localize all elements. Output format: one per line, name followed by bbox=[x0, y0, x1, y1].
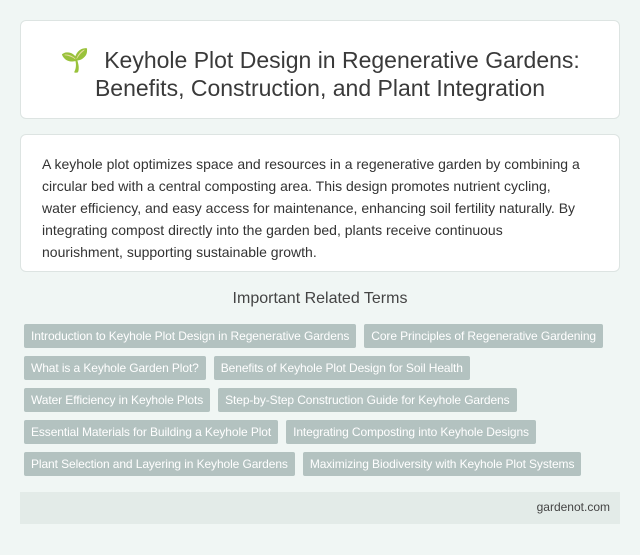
description card: integrating compost directly into the garden bed, plants receive continuous bbox=[42, 222, 503, 238]
tags: What is a Keyhole Garden Plot? bbox=[31, 361, 199, 375]
tags: Water Efficiency in Keyhole Plots bbox=[31, 393, 203, 407]
tags: Integrating Composting into Keyhole Designs bbox=[293, 425, 529, 439]
title card: Keyhole Plot Design in Regenerative Gardens: bbox=[104, 47, 580, 73]
tags bbox=[24, 324, 603, 476]
tags: Benefits of Keyhole Plot Design for Soil Health bbox=[221, 361, 463, 375]
tags: Essential Materials for Building a Keyhole Plot bbox=[31, 425, 271, 439]
description card: A keyhole plot optimizes space and resources in a regenerative garden by combining a bbox=[42, 156, 580, 172]
description card bbox=[20, 134, 620, 272]
footer: gardenot.com bbox=[537, 500, 610, 514]
footer bbox=[20, 492, 620, 524]
description card: water efficiency, and easy access for maintenance, enhancing soil fertility naturally. By bbox=[42, 200, 575, 216]
tags: Maximizing Biodiversity with Keyhole Plot Systems bbox=[310, 457, 574, 471]
title card bbox=[20, 20, 620, 119]
description card: circular bed with a central composting area. This design promotes nutrient cycling, bbox=[42, 178, 551, 194]
heading: related terms: Important Related Terms bbox=[233, 290, 407, 307]
tags: Core Principles of Regenerative Gardening bbox=[371, 329, 596, 343]
title card: Benefits, Construction, and Plant Integration bbox=[95, 75, 545, 101]
tags: Plant Selection and Layering in Keyhole Gardens bbox=[31, 457, 288, 471]
tags: Step-by-Step Construction Guide for Keyhole Gardens bbox=[225, 393, 510, 407]
tags: Introduction to Keyhole Plot Design in Regenerative Gardens bbox=[31, 329, 349, 343]
description card: nourishment, supporting sustainable growth. bbox=[42, 244, 317, 260]
icon: seedling: 🌱 bbox=[61, 47, 90, 73]
